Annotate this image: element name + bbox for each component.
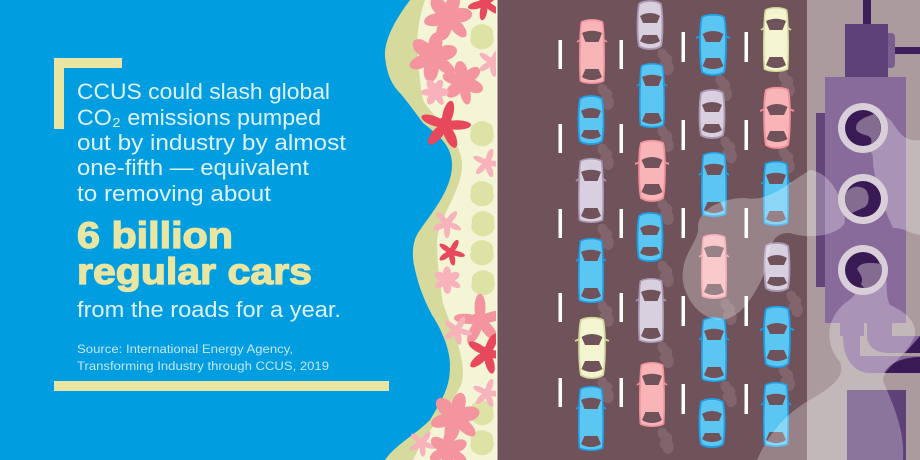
text frame bbox=[54, 58, 389, 391]
intro text bbox=[77, 79, 347, 206]
shrubs bbox=[470, 24, 495, 455]
smoke clouds bbox=[683, 114, 920, 460]
headline figure: 6 billion bbox=[77, 215, 233, 256]
road edge line bbox=[496, 0, 498, 460]
road bbox=[497, 0, 807, 460]
intro text: one-fifth — equivalent bbox=[77, 155, 310, 180]
top pipes bbox=[863, 0, 920, 54]
intro text: out by industry by almost bbox=[77, 130, 347, 155]
cars: lane 1 bbox=[575, 20, 609, 450]
intro text: to removing about bbox=[77, 181, 272, 206]
cars: lane 3 bbox=[696, 15, 730, 447]
cars: lane 2 bbox=[635, 1, 669, 426]
intro text: CO₂ emissions pumped bbox=[77, 105, 321, 130]
headline figure: regular cars bbox=[77, 251, 312, 292]
source: Source: International Energy Agency, bbox=[77, 342, 293, 356]
closing text: from the roads for a year. bbox=[77, 297, 341, 322]
cars: lane 4 bbox=[760, 8, 794, 446]
upper tower bbox=[845, 24, 888, 77]
intro text: CCUS could slash global bbox=[77, 79, 330, 104]
factory ground bbox=[807, 0, 920, 460]
source: Transforming Industry through CCUS, 2019 bbox=[77, 359, 329, 373]
source bbox=[77, 342, 329, 373]
beach bbox=[385, 0, 514, 460]
sand band bbox=[385, 0, 497, 460]
side strip bbox=[816, 113, 830, 287]
lower tank bbox=[847, 390, 906, 460]
exhaust smoke trails bbox=[598, 49, 803, 454]
cream shore bbox=[413, 0, 497, 460]
factory ports bbox=[838, 103, 888, 295]
flowers bbox=[404, 0, 514, 460]
side valve bbox=[885, 33, 895, 68]
lane markings bbox=[558, 32, 748, 414]
factory bbox=[816, 0, 920, 460]
headline figure bbox=[77, 215, 312, 292]
lower pipes bbox=[840, 323, 920, 373]
main body bbox=[825, 77, 906, 323]
